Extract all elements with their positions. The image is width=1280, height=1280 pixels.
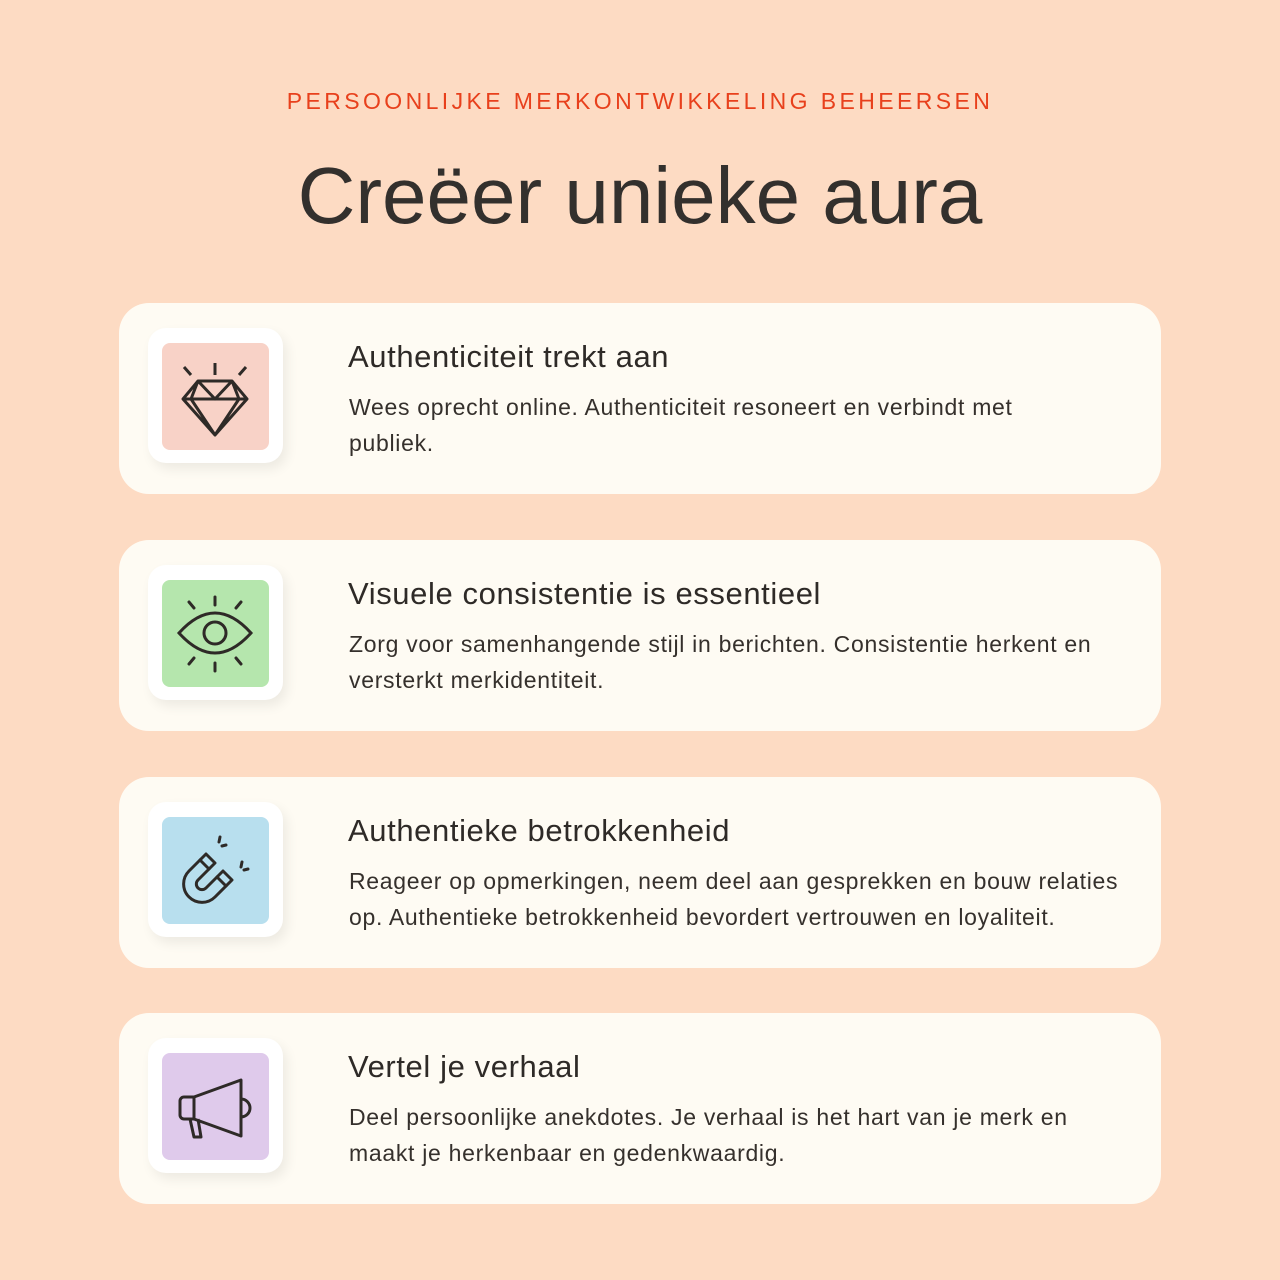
title: Creëer unieke aura [298, 151, 982, 240]
heading: Authentieke betrokkenheid [348, 813, 730, 848]
text [349, 1104, 1068, 1166]
text: Reageer op opmerkingen, neem deel aan gesprekken en bouw relaties [349, 868, 1118, 894]
text: Deel persoonlijke anekdotes. Je verhaal is het hart van je merk en [349, 1104, 1068, 1130]
text [349, 631, 1091, 693]
text: maakt je herkenbaar en gedenkwaardig. [349, 1140, 785, 1166]
icon: megaphone [148, 1038, 283, 1173]
heading: Vertel je verhaal [348, 1049, 580, 1084]
text: op. Authentieke betrokkenheid bevordert vertrouwen en loyaliteit. [349, 904, 1056, 930]
subtitle: PERSOONLIJKE MERKONTWIKKELING BEHEERSEN [287, 88, 993, 114]
panel: story [119, 1013, 1161, 1204]
text [349, 868, 1118, 930]
text [349, 394, 1013, 456]
text: Wees oprecht online. Authenticiteit resoneert en verbindt met [349, 394, 1013, 420]
panel: engagement [119, 777, 1161, 968]
heading: Authenticiteit trekt aan [348, 339, 669, 374]
icon: magnet [148, 802, 283, 937]
panel: authenticity [119, 303, 1161, 494]
text: versterkt merkidentiteit. [349, 667, 604, 693]
text: publiek. [349, 430, 434, 456]
icon: eye [148, 565, 283, 700]
text: Zorg voor samenhangende stijl in berichten. Consistentie herkent en [349, 631, 1091, 657]
icon: diamond [148, 328, 283, 463]
heading: Visuele consistentie is essentieel [348, 576, 821, 611]
panel: visual consistency [119, 540, 1161, 731]
